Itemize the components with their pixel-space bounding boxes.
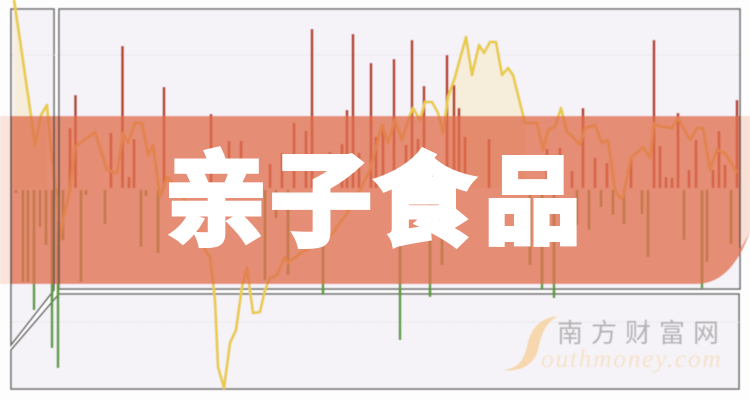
frame lines over band <box>11 116 740 284</box>
watermark url: outhmoney.com <box>541 344 722 373</box>
panel: main upper frame <box>59 9 740 289</box>
watermark chinese name: 南方财富网 <box>557 313 727 350</box>
title band <box>0 116 750 284</box>
title: 食 <box>374 146 474 258</box>
chart: falling green volume bars <box>16 190 731 368</box>
chart: area under price line <box>14 0 525 188</box>
title: 子 <box>270 146 372 260</box>
icon: S swoosh <box>503 316 558 370</box>
title <box>165 144 580 260</box>
band edge right <box>741 116 750 248</box>
title: 亲 <box>165 144 267 258</box>
panel: small left frame <box>11 9 54 345</box>
title: 品 <box>484 150 580 256</box>
watermark logo <box>503 313 727 373</box>
panel: lower frame <box>11 294 739 389</box>
chart: rising red volume bars <box>70 29 737 188</box>
band edge left <box>0 116 10 284</box>
